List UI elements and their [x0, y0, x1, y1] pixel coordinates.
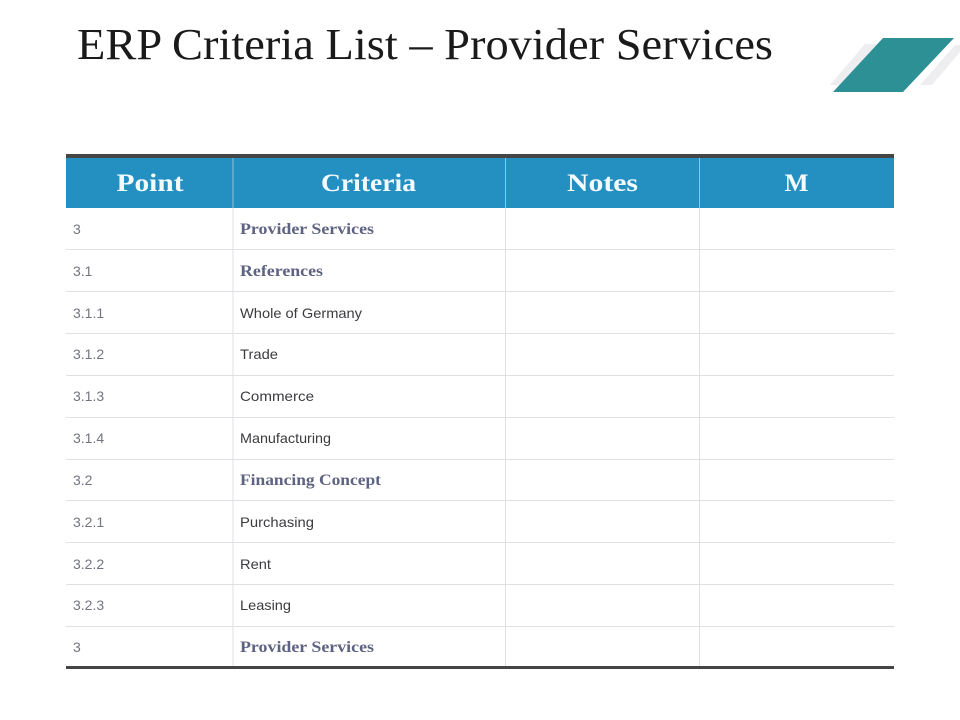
row 3.1: 3.1 [73, 263, 93, 279]
row 3.2 [73, 472, 382, 489]
row 3.2.2 [73, 556, 271, 572]
row 3 [73, 221, 374, 238]
row 3.2.3: 3.2.3 [73, 597, 104, 613]
row 3.1.2: 3.1.2 [73, 346, 104, 362]
row 3.2.2: 3.2.2 [73, 556, 104, 572]
row 3.2: 3.2 [73, 472, 93, 488]
row 3.2.2: Rent [240, 556, 271, 572]
table grid lines [66, 208, 894, 666]
row 3.1.3: Commerce [240, 388, 314, 404]
row 3.2.1 [73, 514, 314, 530]
row 3.2.3 [73, 597, 291, 613]
row 3 final [73, 639, 374, 656]
row 3: Provider Services [240, 221, 374, 238]
row 3.1.1: Whole of Germany [240, 305, 362, 321]
row 3.1.2: Trade [240, 346, 278, 362]
row 3.2.1: 3.2.1 [73, 514, 104, 530]
row 3.1.4: 3.1.4 [73, 430, 104, 446]
row 3.1.3: 3.1.3 [73, 388, 104, 404]
row 3: 3 [73, 221, 81, 237]
row 3.1: References [240, 263, 323, 280]
row 3.1.1: 3.1.1 [73, 305, 104, 321]
row 3.1.3 [73, 388, 314, 404]
table header: Notes [567, 170, 638, 197]
row 3.1.4: Manufacturing [240, 430, 331, 446]
table header: Point [116, 170, 184, 197]
table header [66, 154, 894, 208]
row 3 final: 3 [73, 639, 81, 655]
row 3.1.2 [73, 346, 278, 362]
row 3.2.1: Purchasing [240, 514, 314, 530]
icon: teal parallelogram logo [830, 38, 960, 92]
table header: M [784, 170, 808, 197]
row 3.1.1 [73, 305, 362, 321]
row 3.1.4 [73, 430, 331, 446]
title: ERP Criteria List – Provider Services [77, 20, 773, 69]
table bottom border [66, 666, 894, 669]
row 3.1 [73, 263, 323, 280]
table header: Criteria [321, 170, 417, 197]
table [66, 154, 894, 669]
row 3 final: Provider Services [240, 639, 374, 656]
row 3.2.3: Leasing [240, 597, 291, 613]
row 3.2: Financing Concept [240, 472, 382, 489]
